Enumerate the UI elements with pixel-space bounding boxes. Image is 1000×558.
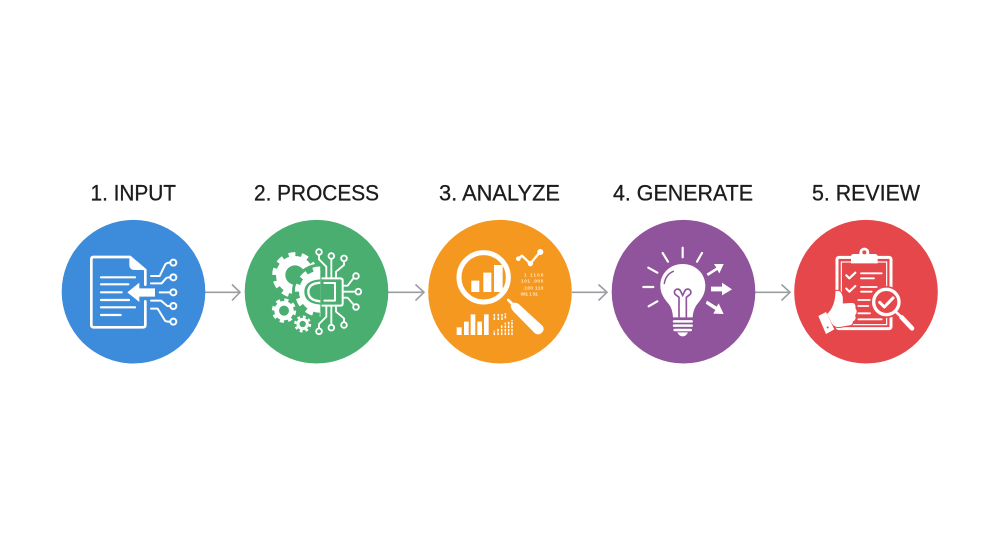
arrow: input to process <box>205 284 240 300</box>
heading: 5. REVIEW: 5. REVIEW <box>812 180 920 206</box>
step 2 circle: process <box>245 220 388 364</box>
icon: magnifying glass with charts and binary data <box>457 249 544 335</box>
step 1 circle: input <box>62 220 205 364</box>
arrow: process to analyze <box>388 284 424 300</box>
binary digits: 061 1 S1 <box>521 292 538 297</box>
binary digits: 1 1100 <box>524 272 544 277</box>
heading: 4. GENERATE: 4. GENERATE <box>613 180 753 206</box>
heading: 2. PROCESS: 2. PROCESS <box>254 180 379 206</box>
icon: clipboard with thumbs up and magnifier <box>818 248 912 334</box>
binary digits: 101 .000 <box>521 279 544 284</box>
arrow: analyze to generate <box>572 284 607 300</box>
step 5 circle: review <box>794 220 938 364</box>
step 4 circle: generate <box>612 220 755 364</box>
heading: 1. INPUT: 1. INPUT <box>90 180 176 206</box>
binary digits <box>521 272 544 297</box>
icon: document with incoming arrow and circuit lines <box>91 256 176 327</box>
arrow: generate to review <box>755 284 790 300</box>
icon: light bulb with rays and arrows <box>643 248 732 336</box>
heading: 3. ANALYZE: 3. ANALYZE <box>439 180 560 206</box>
binary digits: .100 110 <box>523 285 544 290</box>
icon: gears and circuit chip <box>273 249 361 334</box>
step 3 circle: analyze <box>428 220 572 364</box>
